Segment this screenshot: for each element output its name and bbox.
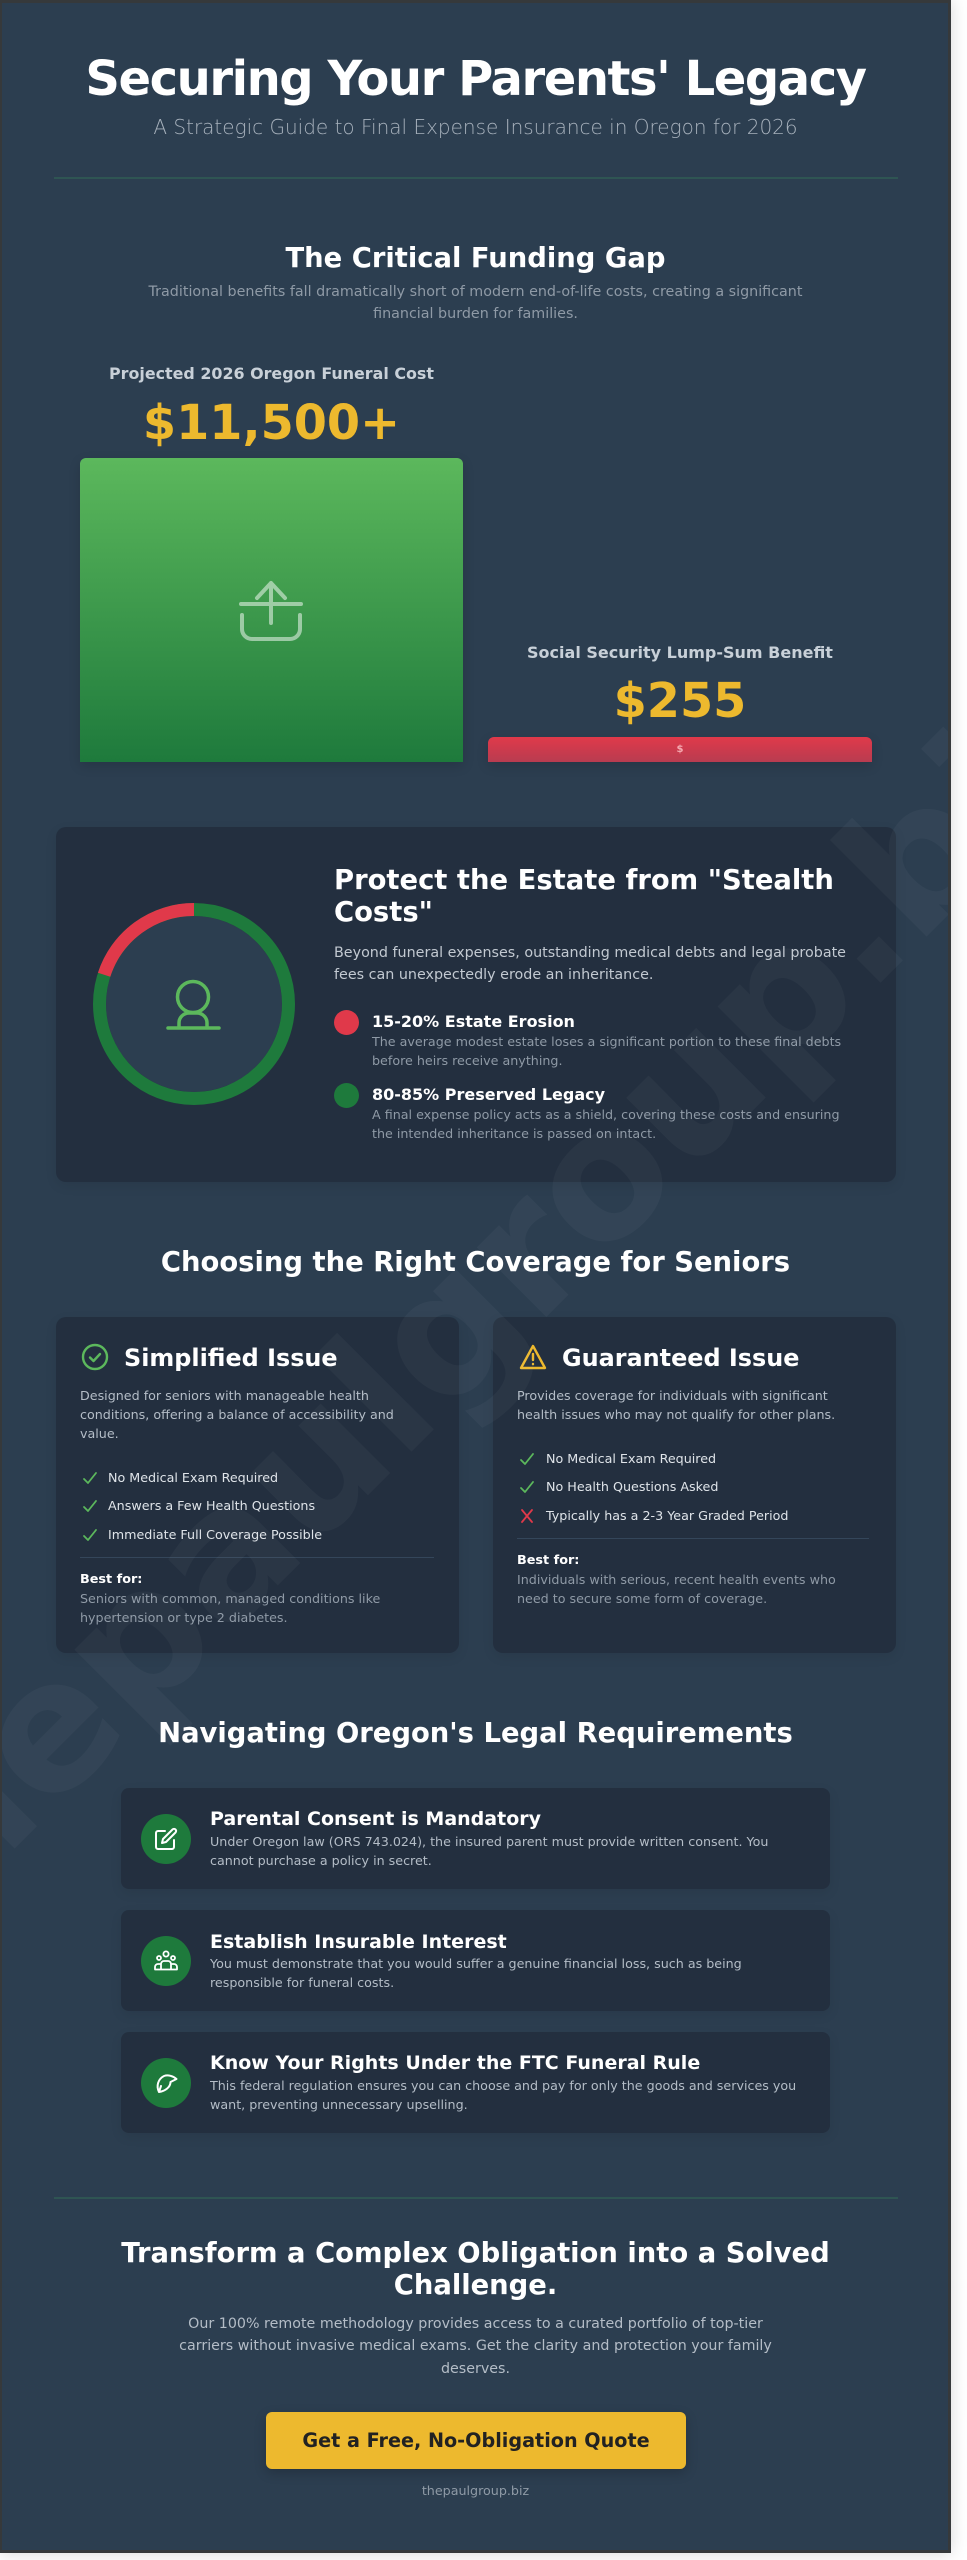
feature list xyxy=(520,1451,788,1523)
item: Immediate Full Coverage Possible xyxy=(108,1527,322,1542)
card description: value. xyxy=(80,1426,119,1441)
feature list xyxy=(83,1470,322,1542)
bar: social security: $ xyxy=(677,744,683,755)
heading: call to action: Transform a Complex Obligation into a Solved xyxy=(121,2238,830,2269)
legend description: The average modest estate loses a significant portion to these final debts xyxy=(372,1034,841,1049)
item: No Medical Exam Required xyxy=(108,1470,278,1485)
best for text: hypertension or type 2 diabetes. xyxy=(80,1610,288,1625)
legend description xyxy=(372,1034,841,1068)
panel: guaranteed issue xyxy=(493,1317,896,1653)
panel heading: Costs" xyxy=(334,897,433,928)
best for text xyxy=(517,1572,836,1606)
button: quote: Get a Free, No-Obligation Quote xyxy=(302,2429,650,2452)
footer url: thepaulgroup.biz xyxy=(422,2483,529,2498)
item title: Know Your Rights Under the FTC Funeral Rule xyxy=(210,2052,700,2074)
call to action text: deserves. xyxy=(441,2361,510,2377)
call to action text xyxy=(179,2316,772,2377)
card title: Simplified Issue xyxy=(124,1344,338,1372)
item title: Parental Consent is Mandatory xyxy=(210,1808,541,1830)
icon: umbrella leaf xyxy=(141,2058,191,2108)
panel: insurable interest xyxy=(121,1910,830,2011)
bar: social security xyxy=(488,737,872,762)
best for text: Seniors with common, managed conditions like xyxy=(80,1591,380,1606)
legend dot green xyxy=(334,1083,359,1108)
legend title: 15-20% Estate Erosion xyxy=(372,1012,575,1031)
card description: conditions, offering a balance of accessibility and xyxy=(80,1407,394,1422)
item text: Under Oregon law (ORS 743.024), the insured parent must provide written consent. You xyxy=(210,1834,768,1849)
icon: edit xyxy=(141,1814,191,1864)
panel heading xyxy=(334,865,834,928)
value: social security: $255 xyxy=(614,674,746,729)
card description: Provides coverage for individuals with significant xyxy=(517,1388,828,1403)
panel heading: Protect the Estate from "Stealth xyxy=(334,865,834,896)
best for label: Best for: xyxy=(517,1553,579,1568)
panel intro: fees can unexpectedly erode an inheritance. xyxy=(334,967,653,983)
legend: erosion xyxy=(334,1010,841,1068)
card description: Designed for seniors with manageable health xyxy=(80,1388,369,1403)
heading: coverage: Choosing the Right Coverage for Seniors xyxy=(161,1247,790,1278)
legend: preserved xyxy=(334,1083,840,1141)
subtitle: A Strategic Guide to Final Expense Insurance in Oregon for 2026 xyxy=(153,115,798,139)
card description: health issues who may not qualify for other plans. xyxy=(517,1407,835,1422)
panel intro xyxy=(334,945,846,983)
bar: funeral cost xyxy=(80,458,463,762)
legend dot red xyxy=(334,1010,359,1035)
item text: want, preventing unnecessary upselling. xyxy=(210,2097,468,2112)
legend description: the intended inheritance is passed on intact. xyxy=(372,1126,656,1141)
heading: call to action: Challenge. xyxy=(394,2270,557,2301)
card title: Guaranteed Issue xyxy=(562,1344,799,1372)
item text: This federal regulation ensures you can choose and pay for only the goods and services you xyxy=(210,2078,796,2093)
funding gap intro text: financial burden for families. xyxy=(373,306,578,322)
item text: responsible for funeral costs. xyxy=(210,1975,394,1990)
panel: simplified issue xyxy=(56,1317,459,1653)
best for text: need to secure some form of coverage. xyxy=(517,1591,767,1606)
value: funeral cost: $11,500+ xyxy=(143,396,400,451)
icon: check circle xyxy=(82,1344,108,1370)
item text xyxy=(210,1956,742,1990)
label: social security: Social Security Lump-Sum Benefit xyxy=(527,643,833,662)
label: funeral cost: Projected 2026 Oregon Funeral Cost xyxy=(109,364,434,383)
heading: call to action xyxy=(121,2238,830,2301)
legend title: 80-85% Preserved Legacy xyxy=(372,1085,605,1104)
icon: upload tray xyxy=(239,580,303,641)
heading: funding gap: The Critical Funding Gap xyxy=(286,243,665,274)
call to action text: Our 100% remote methodology provides access to a curated portfolio of top-tier xyxy=(188,2316,763,2332)
panel intro: Beyond funeral expenses, outstanding medical debts and legal probate xyxy=(334,945,846,961)
item text: cannot purchase a policy in secret. xyxy=(210,1853,432,1868)
title: Securing Your Parents' Legacy xyxy=(85,51,866,107)
funding gap intro text xyxy=(148,284,802,322)
panel: ftc funeral rule xyxy=(121,2032,830,2133)
card description xyxy=(80,1388,394,1441)
best for label: Best for: xyxy=(80,1572,142,1587)
item text xyxy=(210,2078,796,2112)
legend description: before heirs receive anything. xyxy=(372,1053,562,1068)
funding gap intro text: Traditional benefits fall dramatically short of modern end-of-life costs, creating a significant xyxy=(149,284,802,300)
icon: warning triangle xyxy=(520,1344,546,1370)
item title: Establish Insurable Interest xyxy=(210,1931,507,1953)
card description xyxy=(517,1388,835,1422)
item: No Health Questions Asked xyxy=(546,1479,718,1494)
best for text: Individuals with serious, recent health events who xyxy=(517,1572,836,1587)
best for text xyxy=(80,1591,380,1625)
call to action text: carriers without invasive medical exams. Get the clarity and protection your family xyxy=(179,2338,772,2354)
button: quote xyxy=(266,2412,686,2469)
icon: people xyxy=(141,1936,191,1986)
item: Typically has a 2-3 Year Graded Period xyxy=(546,1508,788,1523)
legend description xyxy=(372,1107,840,1141)
item text: You must demonstrate that you would suffer a genuine financial loss, such as being xyxy=(210,1956,742,1971)
panel: parental consent xyxy=(121,1788,830,1889)
donut chart xyxy=(93,903,295,1105)
item: Answers a Few Health Questions xyxy=(108,1498,315,1513)
legend description: A final expense policy acts as a shield, covering these costs and ensuring xyxy=(372,1107,840,1122)
panel: stealth costs xyxy=(56,827,896,1182)
item text xyxy=(210,1834,768,1868)
item: No Medical Exam Required xyxy=(546,1451,716,1466)
heading: legal requirements: Navigating Oregon's Legal Requirements xyxy=(158,1718,793,1749)
bar chart: funding gap xyxy=(80,364,872,762)
